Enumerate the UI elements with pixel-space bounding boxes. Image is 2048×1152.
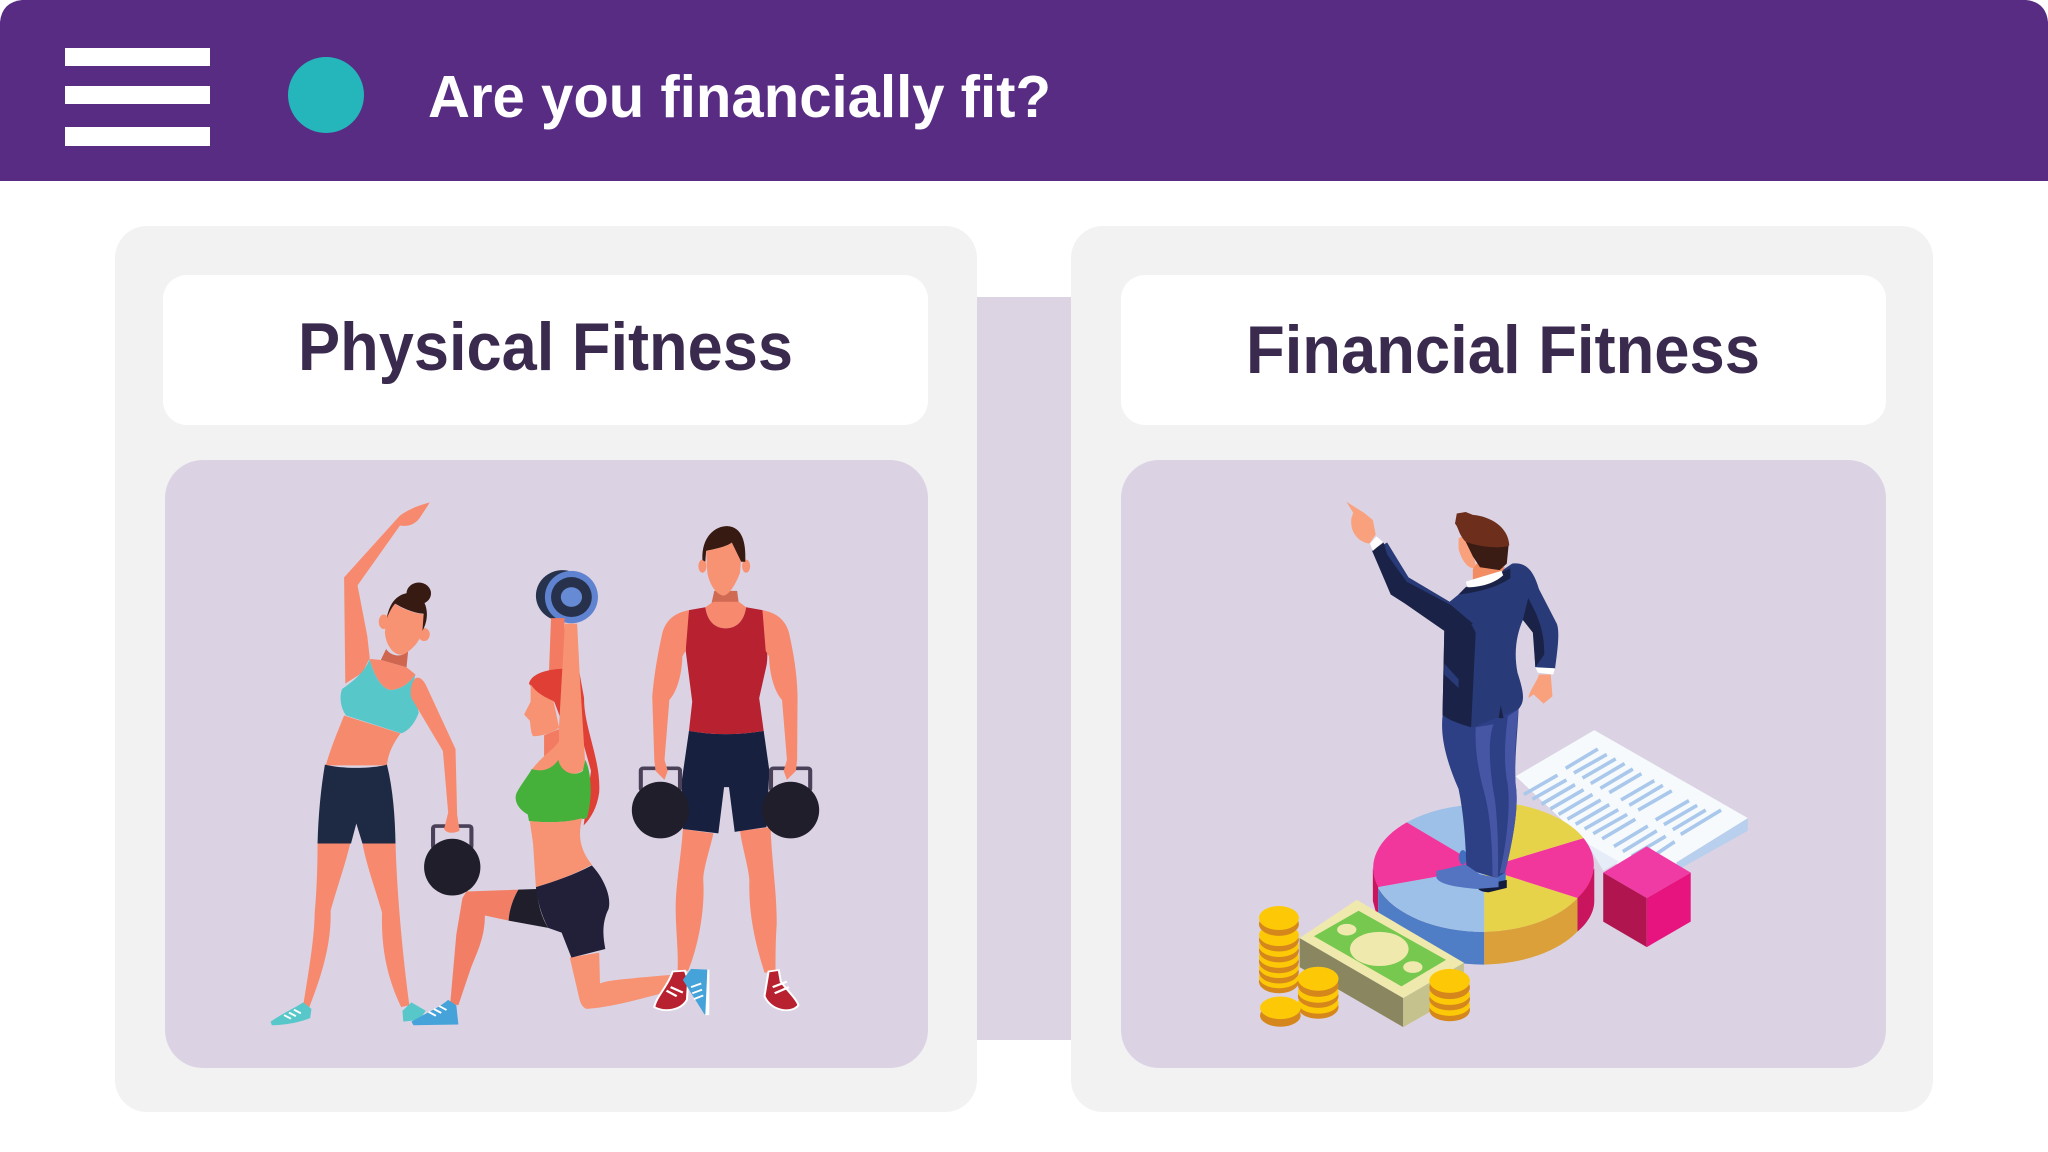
figure: stretching woman	[271, 503, 480, 1025]
banknotes	[1300, 900, 1464, 1027]
illustration: businessman on pie chart with money	[1259, 502, 1748, 1027]
heading card: financial fitness	[1121, 275, 1886, 425]
icon: menu	[65, 48, 210, 146]
connector band	[970, 297, 1080, 1040]
figure: lunging woman with dumbbell	[411, 570, 685, 1025]
panel: financial fitness	[1071, 226, 1933, 1112]
cube	[1603, 846, 1691, 947]
document	[1516, 730, 1748, 871]
pie chart	[1373, 804, 1594, 965]
figure: businessman pointing	[1346, 502, 1558, 892]
illustration: three people exercising	[271, 503, 819, 1025]
image panel: financial fitness	[1121, 460, 1886, 1068]
panel: physical fitness	[115, 226, 977, 1112]
image panel: physical fitness	[165, 460, 928, 1068]
icon: teal circle	[288, 57, 364, 133]
header bar	[0, 0, 2048, 181]
figure: man with kettlebells	[632, 526, 819, 1015]
heading card: financial fitness: Financial Fitness	[1246, 312, 1760, 388]
coins	[1259, 906, 1470, 1027]
heading card: physical fitness: Physical Fitness	[298, 309, 793, 385]
heading card: physical fitness	[163, 275, 928, 425]
title: Are you financially fit?	[428, 64, 1051, 130]
